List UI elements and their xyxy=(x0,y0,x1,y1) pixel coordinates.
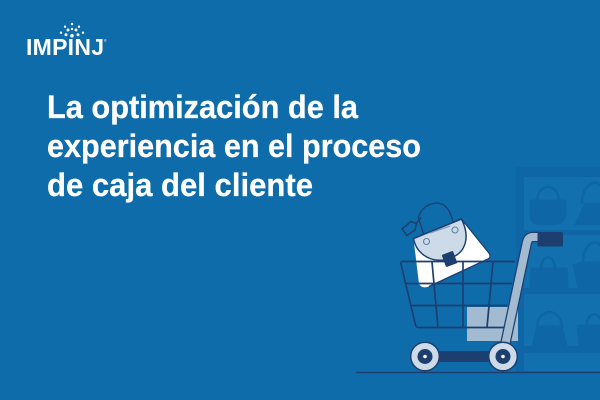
title: de caja del cliente xyxy=(47,167,313,203)
flap stitching xyxy=(430,226,450,233)
handbags row 2 xyxy=(530,243,600,288)
cart pole and handle arm xyxy=(506,237,540,343)
axle xyxy=(436,351,492,362)
logo: Impinj xyxy=(26,23,107,60)
cardboard box in cart xyxy=(467,307,518,341)
background shelves with handbags xyxy=(516,167,600,372)
handbags row 3 xyxy=(532,312,600,346)
bag outline xyxy=(429,219,490,286)
cart basket xyxy=(401,262,515,328)
shelf frame xyxy=(516,167,600,372)
rivets xyxy=(424,238,430,244)
registered mark: ® xyxy=(104,39,107,43)
shopping cart xyxy=(401,232,563,371)
left wheel xyxy=(411,342,439,371)
logo dots xyxy=(60,23,84,38)
ground line xyxy=(356,372,600,374)
bag handle xyxy=(418,203,453,222)
title: experiencia en el proceso xyxy=(47,128,421,164)
bag body xyxy=(414,219,490,287)
price tag xyxy=(402,222,416,236)
handbags row 1 xyxy=(530,183,600,225)
handle strap and tag string xyxy=(416,217,424,235)
clasp xyxy=(442,251,457,267)
title: La optimización de la xyxy=(47,89,359,125)
logo wordmark: IMPINJ xyxy=(26,34,104,60)
right wheel xyxy=(489,342,517,371)
bag flap xyxy=(414,219,466,260)
shelf panels xyxy=(524,177,600,371)
handbag in cart xyxy=(402,203,490,287)
cart handle grip xyxy=(538,232,563,246)
